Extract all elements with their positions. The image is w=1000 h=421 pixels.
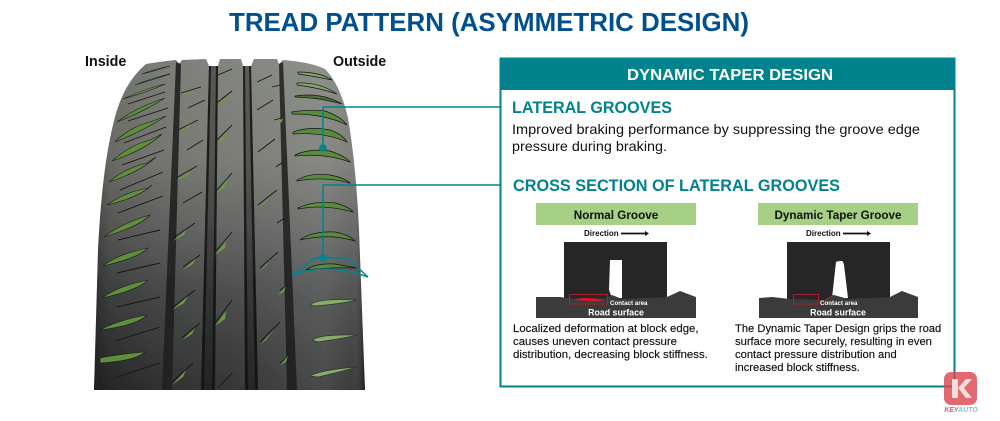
text: dynamic taper caption: contact pressure distribution and [735,349,897,361]
logo: keyauto [944,372,978,414]
diagram: normal groove: Direction [584,229,619,238]
heading: lateral grooves: LATERAL GROOVES [512,99,672,117]
green sipes in centre ribs [172,72,288,385]
diagram: normal groove: Normal Groove [574,209,659,222]
text: normal groove caption: causes uneven contact pressure [513,336,677,348]
diagram: dynamic taper groove: Contact area [820,300,858,307]
diagram: dynamic taper groove: Road surface [810,308,866,318]
title: TREAD PATTERN (ASYMMETRIC DESIGN) [229,7,749,37]
text: dynamic taper caption: The Dynamic Taper Design grips the road [735,323,941,335]
text: dynamic taper caption: surface more securely, resulting in even [735,336,932,348]
diagram: normal groove: Contact area [610,300,648,307]
panel: dynamic taper design [500,58,955,386]
diagram: normal groove: Road surface [588,308,644,318]
panel heading: DYNAMIC TAPER DESIGN [627,67,833,84]
diagram: normal groove [536,203,696,318]
tire tread illustration [94,59,365,390]
diagram: dynamic taper groove [758,203,918,318]
text: lateral grooves description: pressure during braking. [512,138,667,154]
text: lateral grooves description: Improved braking performance by suppressing the groove edge [512,121,920,137]
logo: keyauto: KEYAUTO [944,407,978,414]
left shoulder grooves [100,66,170,363]
callout: cross section leader [292,185,500,277]
callout: lateral grooves leader [320,107,500,151]
text: normal groove caption: distribution, decreasing block stiffness. [513,349,708,361]
right shoulder grooves [292,72,358,377]
panel header [500,58,955,90]
text: normal groove caption: Localized deformation at block edge, [513,323,699,335]
text: dynamic taper caption: increased block stiffness. [735,362,860,374]
heading: cross section: CROSS SECTION OF LATERAL GROOVES [513,177,840,195]
diagram: dynamic taper groove: Direction [806,229,841,238]
label: inside: Inside [85,54,126,70]
label: outside: Outside [333,54,386,70]
circumferential grooves [162,62,297,390]
diagram: dynamic taper groove: Dynamic Taper Groove [774,209,902,222]
thin sipes [115,69,288,388]
